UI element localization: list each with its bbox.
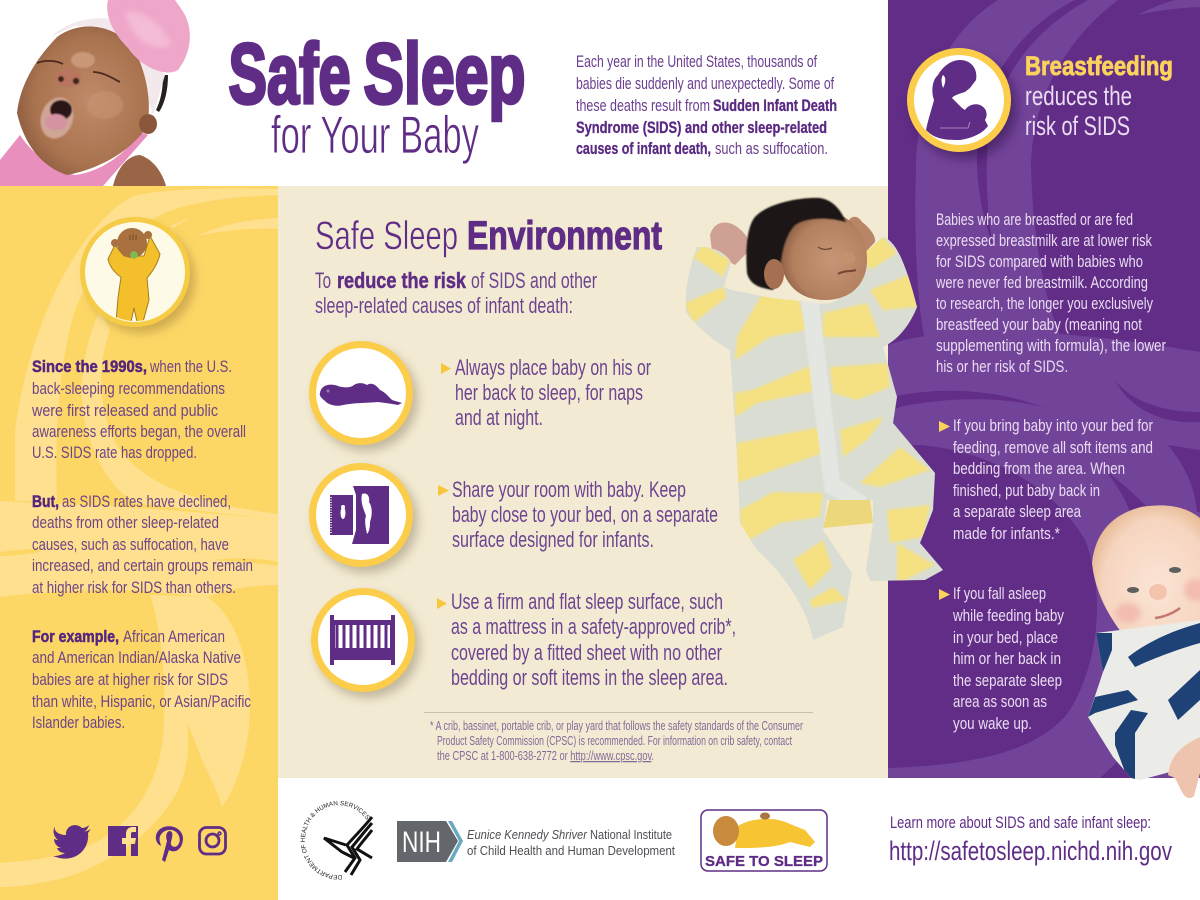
logo: NIH	[397, 821, 675, 862]
subheading: reduce the risk: reduce the risk	[337, 268, 467, 293]
bullet: share room: Share your room with baby. Keep	[452, 477, 686, 502]
text block: breastfeeding paragraph	[935, 211, 1166, 376]
panel: center cream	[278, 186, 888, 778]
bullet: back to sleep	[441, 355, 651, 430]
bullet: baby in your bed	[939, 417, 1153, 543]
heading: breastfeeding reduces the risk of SIDS: risk of SIDS	[1025, 111, 1130, 141]
intro text: Sudden Infant Death	[713, 97, 837, 115]
logo: NIH: NIH	[402, 826, 441, 859]
panel: left yellow column	[0, 186, 278, 900]
heading: breastfeeding reduces the risk of SIDS	[1025, 51, 1173, 141]
paragraph: since the 1990s: awareness efforts began, the overall	[32, 423, 246, 441]
paragraph: for example: For example,	[32, 628, 119, 646]
footnote: * A crib, bassinet, portable crib, or play yard that follows the safety standards of the Consumer	[430, 719, 803, 733]
bullet: fall asleep feeding: area as soon as	[953, 693, 1047, 711]
intro text: babies die suddenly and unexpectedly. Some of	[576, 75, 834, 93]
panel: right purple column	[888, 0, 1200, 778]
paragraph: for example	[32, 628, 251, 732]
heading: safe sleep environment	[315, 214, 662, 258]
heading: safe sleep environment: Safe Sleep	[315, 214, 458, 258]
heading: breastfeeding reduces the risk of SIDS: reduces the	[1025, 81, 1132, 111]
paragraph: but: increased, and certain groups remain	[32, 557, 253, 575]
bullet: share room	[438, 477, 718, 552]
bullet: fall asleep feeding: in your bed, place	[953, 629, 1058, 647]
subheading: reduce the risk: To	[315, 268, 331, 293]
heading: breastfeeding reduces the risk of SIDS: Breastfeeding	[1025, 51, 1173, 81]
bullet: baby in your bed: finished, put baby back in	[953, 482, 1100, 500]
bullet: back to sleep: and at night.	[455, 405, 543, 430]
paragraph: since the 1990s: U.S. SIDS rate has dropped.	[32, 444, 197, 462]
social icons	[53, 825, 226, 862]
paragraph: for example: than white, Hispanic, or Asian/Pacific	[32, 693, 251, 711]
bullet: back to sleep: Always place baby on his or	[455, 355, 651, 380]
bullet: baby in your bed: If you bring baby into your bed for	[953, 417, 1153, 435]
text block: breastfeeding paragraph: were never fed breastmilk. According	[935, 274, 1148, 292]
footnote	[424, 712, 813, 763]
subheading: reduce the risk: of SIDS and other	[471, 268, 597, 293]
bullet: baby in your bed: bedding from the area. When	[953, 460, 1125, 478]
bullet: share room: surface designed for infants.	[452, 527, 654, 552]
logo: safe to sleep: SAFE TO SLEEP	[705, 853, 823, 870]
paragraph: but: as SIDS rates have declined,	[62, 493, 231, 511]
paragraph: but: But,	[32, 493, 59, 511]
bullet: firm flat surface: covered by a fitted sheet with no other	[451, 640, 722, 665]
paragraph: since the 1990s: were first released and public	[31, 402, 218, 420]
bullet: firm flat surface: Use a firm and flat sleep surface, such	[451, 589, 723, 614]
icon: facebook	[108, 826, 138, 856]
icon: crib	[311, 588, 420, 698]
icon: instagram	[200, 828, 226, 854]
text block: breastfeeding paragraph: Babies who are breastfed or are fed	[936, 211, 1133, 229]
bullet: fall asleep feeding: you wake up.	[953, 715, 1032, 733]
logo: HHS seal: DEPARTMENT OF HEALTH & HUMAN SERVICES·USA	[300, 800, 370, 880]
logo: safe to sleep	[701, 810, 827, 871]
text block: left column paragraphs	[31, 358, 253, 732]
photo: sleeping baby in striped onesie	[680, 198, 960, 650]
bullet: baby in your bed: feeding, remove all soft items and	[953, 439, 1153, 457]
logo: NIH: National Institute	[590, 828, 672, 842]
footnote: Product Safety Commission (CPSC) is recommended. For information on crib safety, contact	[437, 734, 792, 748]
bullet: baby in your bed: a separate sleep area	[953, 503, 1082, 521]
bullet: firm flat surface	[437, 589, 736, 690]
logo: NIH: Eunice Kennedy Shriver	[467, 828, 588, 842]
logo: NIH: of Child Health and Human Development	[467, 844, 675, 858]
title	[228, 27, 526, 165]
heading: safe sleep environment: Environment	[467, 214, 662, 258]
title word: Sleep: Sleep	[364, 27, 526, 122]
footnote: the CPSC at 1-800-638-2772 or http://www.cpsc.gov.	[437, 749, 654, 763]
paragraph: for example: babies are at higher risk for SIDS	[32, 671, 228, 689]
subheading: reduce the risk	[315, 268, 597, 318]
text block: breastfeeding paragraph: breastfeed your baby (meaning not	[936, 316, 1142, 334]
bullet: share room: baby close to your bed, on a separate	[452, 502, 718, 527]
title word: Safe: Safe	[228, 27, 350, 122]
paragraph: for example: Islander babies.	[32, 714, 125, 732]
paragraph: since the 1990s	[31, 358, 246, 462]
paragraph: but: at higher risk for SIDS than others.	[32, 579, 236, 597]
bullet: fall asleep feeding	[939, 585, 1065, 733]
intro text	[576, 53, 837, 158]
intro text: these deaths result from	[576, 97, 710, 115]
intro text: causes of infant death,	[576, 140, 711, 158]
subtitle: for Your Baby: for Your Baby	[271, 106, 479, 165]
paragraph: but	[32, 493, 253, 597]
paragraph: since the 1990s: back-sleeping recommendations	[32, 380, 225, 398]
photo: yawning baby with pink bow	[0, 0, 190, 186]
bullet: fall asleep feeding: If you fall asleep	[953, 585, 1046, 603]
icon: pinterest	[156, 826, 183, 862]
paragraph: for example: African American	[123, 628, 225, 646]
photo: smiling baby in navy stripes	[1085, 505, 1200, 798]
icon: baby in onesie circle	[80, 217, 195, 333]
paragraph: for example: and American Indian/Alaska Native	[32, 649, 241, 667]
logo: HHS seal	[300, 800, 374, 880]
bullet: fall asleep feeding: the separate sleep	[953, 672, 1062, 690]
paragraph: since the 1990s: when the U.S.	[149, 358, 232, 376]
paragraph: but: causes, such as suffocation, have	[32, 536, 229, 554]
intro text: Each year in the United States, thousands of	[576, 53, 817, 71]
paragraph: since the 1990s: Since the 1990s,	[32, 358, 147, 376]
icon: twitter	[53, 825, 91, 859]
bullet: fall asleep feeding: him or her back in	[953, 650, 1061, 668]
bullet: firm flat surface: as a mattress in a safety-approved crib*,	[451, 614, 736, 639]
bullet: back to sleep: her back to sleep, for naps	[455, 380, 643, 405]
subheading: reduce the risk: sleep-related causes of infant death:	[315, 293, 573, 318]
call to action: learn more	[889, 814, 1172, 866]
icon: breastfeeding mother circle	[907, 48, 1017, 159]
text block: breastfeeding paragraph: his or her risk of SIDS.	[936, 358, 1068, 376]
paragraph: but: deaths from other sleep-related	[32, 514, 219, 532]
bullet: firm flat surface: bedding or soft items in the sleep area.	[451, 665, 728, 690]
icon: room sharing	[309, 463, 418, 573]
text block: breastfeeding paragraph: for SIDS compared with babies who	[936, 253, 1143, 271]
bullet: baby in your bed: made for infants.*	[953, 525, 1060, 543]
icon: baby on back	[309, 341, 418, 451]
intro text: such as suffocation.	[715, 140, 828, 158]
intro text: Syndrome (SIDS) and other sleep-related	[576, 119, 827, 137]
bullet: fall asleep feeding: while feeding baby	[952, 607, 1065, 625]
